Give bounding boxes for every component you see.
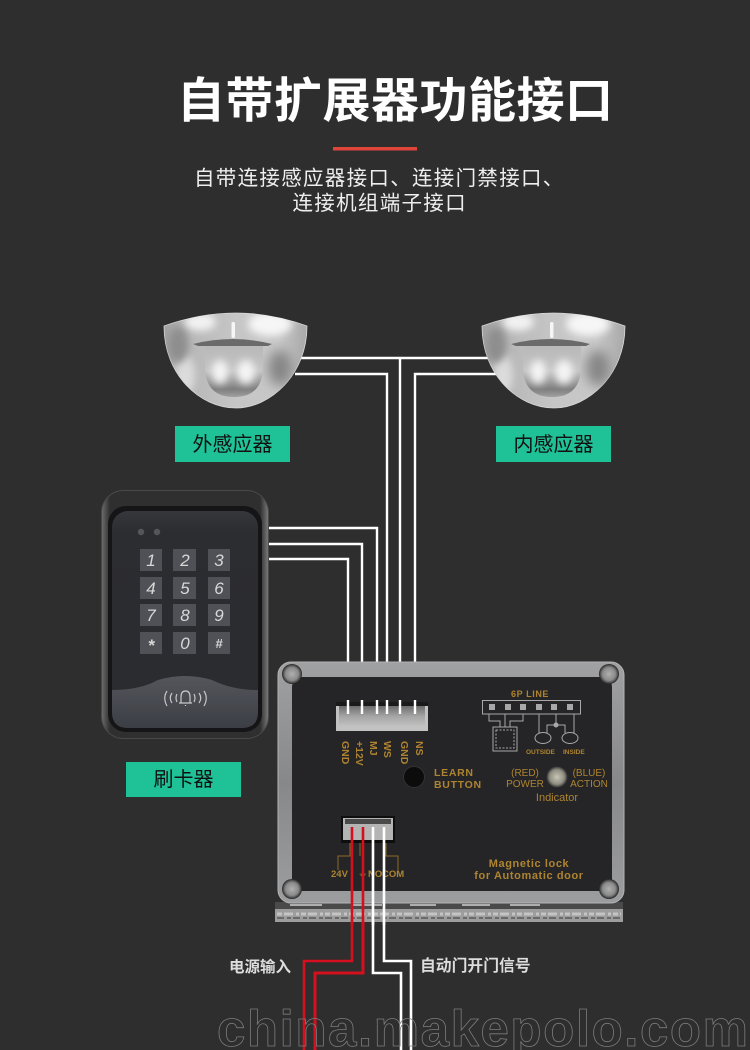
power connector labels: ⏚ <box>358 869 368 880</box>
learn button <box>404 766 424 788</box>
metal bracket <box>275 902 623 922</box>
label: inside sensor: 内感应器 <box>514 433 594 456</box>
connector pin labels <box>339 741 425 766</box>
connector pin labels: MJ <box>367 741 379 756</box>
product name text: Magnetic lock <box>489 858 570 870</box>
icon: card reader keypad: 4 <box>146 579 156 598</box>
label: outside sensor <box>175 426 290 462</box>
subtitle text: 自带连接感应器接口、连接门禁接口、 <box>194 167 565 190</box>
indicator section <box>506 766 608 804</box>
wire ends over connector <box>348 700 415 714</box>
icon: card reader keypad: 3 <box>214 551 224 570</box>
wiring diagram 6P line <box>482 689 585 756</box>
card reader wires <box>266 528 377 713</box>
icon: card reader keypad: 2 <box>179 551 190 570</box>
icon: inside sensor dome <box>482 312 625 408</box>
red accent line <box>333 147 417 150</box>
subtitle text <box>194 167 565 215</box>
icon: card reader keypad: 0 <box>180 634 190 653</box>
connector pin labels: +12V <box>353 741 365 766</box>
product name text: for Automatic door <box>474 870 584 882</box>
learn button label: LEARN <box>434 767 474 779</box>
label: door signal: 自动门开门信号 <box>420 957 531 975</box>
connector pin labels: GND <box>398 741 410 765</box>
sensor wires <box>295 358 497 713</box>
power and signal wires below controller <box>304 827 411 1050</box>
power connector labels: 24V <box>331 869 349 880</box>
indicator section: (BLUE) <box>573 768 605 779</box>
icon: card reader keypad: # <box>215 636 223 651</box>
indicator section: POWER <box>506 779 544 790</box>
wires entering power connector <box>352 827 384 925</box>
power connector <box>341 816 395 843</box>
icon: card reader keypad: 9 <box>214 606 224 625</box>
product name text <box>474 858 584 882</box>
wiring diagram 6P line: OUTSIDE <box>526 749 556 756</box>
wiring diagram 6P line: INSIDE <box>563 749 585 756</box>
subtitle text: 连接机组端子接口 <box>292 192 467 215</box>
screws <box>282 664 619 899</box>
power connector labels <box>331 869 404 880</box>
wiring diagram 6P line: 6P LINE <box>511 689 549 699</box>
label: card reader: 刷卡器 <box>154 768 214 791</box>
icon: card reader keypad: * <box>148 636 156 655</box>
power connector labels: COM <box>382 869 404 880</box>
label: outside sensor: 外感应器 <box>192 433 272 456</box>
sensor connector <box>336 702 428 731</box>
icon: outside sensor dome <box>164 312 307 408</box>
grey housing <box>278 662 624 903</box>
icon: card reader keypad: 1 <box>146 551 156 570</box>
icon: card reader keypad: 7 <box>146 606 156 625</box>
panel: controller box <box>275 662 624 925</box>
learn button label <box>434 767 482 791</box>
indicator section: (RED) <box>511 768 539 779</box>
icon: card reader keypad: 6 <box>214 579 224 598</box>
label: card reader <box>126 762 241 797</box>
label: inside sensor <box>496 426 611 462</box>
label: power input: 电源输入 <box>229 957 292 976</box>
power connector labels: NO <box>368 869 382 880</box>
connector pin labels: GND <box>339 741 351 765</box>
indicator section: ACTION <box>570 779 608 790</box>
connector pin labels: NS <box>413 741 425 756</box>
icon: card reader keypad: 8 <box>180 606 190 625</box>
icon: card reader keypad <box>102 490 268 738</box>
icon: card reader keypad: 5 <box>180 579 190 598</box>
indicator section: Indicator <box>536 792 578 804</box>
power connector bracket lines <box>338 843 398 870</box>
learn button label: BUTTON <box>434 779 482 791</box>
title: 自带扩展器功能接口 <box>177 75 614 128</box>
connector pin labels: WS <box>381 741 393 758</box>
